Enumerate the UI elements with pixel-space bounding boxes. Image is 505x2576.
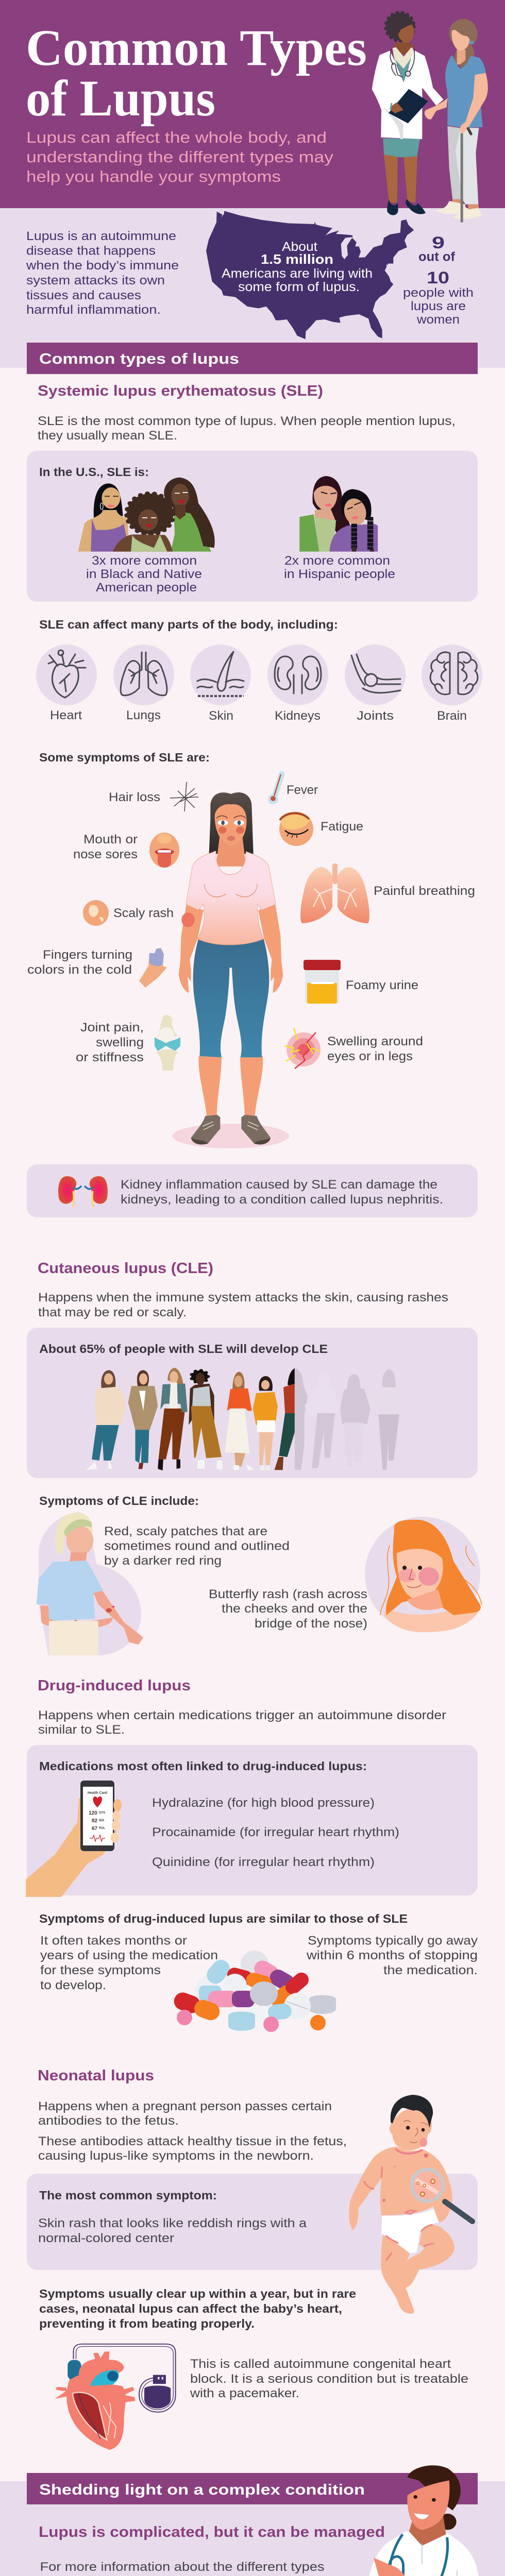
person 3 bbox=[158, 1368, 188, 1470]
title bbox=[26, 19, 367, 127]
faded person 8 bbox=[305, 1374, 341, 1469]
symptom: mouth or nose sores: Mouth or bbox=[83, 833, 138, 846]
text: red scaly patches: by a darker red ring bbox=[104, 1554, 222, 1568]
text: red scaly patches: sometimes round and outlined bbox=[104, 1539, 290, 1553]
pictogram: ten women bbox=[87, 1368, 406, 1470]
subheading: symptoms clear up bbox=[39, 2287, 356, 2330]
intro text: when the body’s immune bbox=[26, 259, 179, 273]
caption: 3x more common: in Black and Native bbox=[86, 567, 202, 581]
symptom: joint pain bbox=[76, 1015, 180, 1071]
section bar: shedding light bbox=[27, 2473, 478, 2504]
medication list: Hydralazine (for high blood pressure) bbox=[152, 1796, 375, 1810]
person 2 bbox=[128, 1370, 158, 1469]
symptom: fingers turning colors bbox=[27, 948, 167, 988]
statistic: 9 out of 10 women: 10 bbox=[427, 268, 449, 287]
text: symptoms go away: within 6 months of stopping bbox=[306, 1948, 478, 1962]
panel: 65 percent statistic: About 65% of people with SLE will develop CLE bbox=[39, 1342, 328, 1355]
medication list bbox=[152, 1796, 399, 1869]
panel: medications bbox=[26, 1745, 478, 1897]
text: butterfly rash: Butterfly rash (rash across bbox=[209, 1587, 367, 1601]
section bar: shedding light: Shedding light on a complex condition bbox=[39, 2482, 365, 2498]
intro text bbox=[26, 229, 179, 317]
statistic: 9 out of 10 women: women bbox=[416, 313, 460, 327]
US map with statistic: 1.5 million bbox=[261, 251, 333, 267]
medication list: Quinidine (for irregular heart rhythm) bbox=[152, 1855, 375, 1869]
text: months or years: years of using the medication bbox=[40, 1948, 218, 1962]
statistic: 9 out of 10 women bbox=[403, 233, 474, 327]
section bar: common types of lupus bbox=[27, 343, 478, 374]
CLE intro text bbox=[38, 1291, 448, 1319]
panel: most common symptom: normal-colored center bbox=[38, 2231, 174, 2245]
US map with statistic: Americans are living with bbox=[222, 266, 373, 281]
symptom: foamy urine: Foamy urine bbox=[346, 978, 418, 992]
panel: most common symptom: The most common symptom: bbox=[39, 2189, 217, 2202]
subheading: symptoms clear up: cases, neonatal lupus can affect the baby’s heart, bbox=[39, 2302, 342, 2315]
subtitle bbox=[26, 128, 334, 185]
intro text: Lupus is an autoimmune bbox=[26, 229, 176, 243]
illustration: woman with butterfly rash bbox=[365, 1517, 482, 1632]
symptom: swelling: eyes or in legs bbox=[327, 1049, 413, 1063]
panel: medications: Medications most often linked to drug-induced lupus: bbox=[39, 1759, 367, 1773]
title: of Lupus bbox=[26, 70, 215, 127]
title: Common Types bbox=[26, 19, 367, 76]
heading: can be managed: Lupus is complicated, but it can be managed bbox=[39, 2524, 385, 2540]
floor shadow bbox=[173, 1124, 289, 1148]
text: congenital heart block bbox=[190, 2357, 468, 2400]
neonatal intro text bbox=[38, 2099, 347, 2163]
illustration: hand holding phone bbox=[26, 1781, 122, 1897]
faded person 10 bbox=[372, 1369, 406, 1470]
illustration: heart with pacemaker bbox=[55, 2344, 176, 2450]
text: months or years: It often takes months or bbox=[40, 1934, 187, 1947]
icon: skin bbox=[190, 645, 251, 723]
neonatal intro text: causing lupus-like symptoms in the newborn. bbox=[38, 2149, 314, 2163]
illustration: woman with rash on arms bbox=[37, 1512, 143, 1655]
text: congenital heart block: with a pacemaker. bbox=[190, 2386, 299, 2400]
symptom: painful breathing bbox=[300, 863, 475, 923]
person 1 bbox=[87, 1370, 125, 1470]
symptom: fever: Fever bbox=[287, 783, 318, 797]
SLE intro text: they usually mean SLE. bbox=[38, 429, 177, 443]
statistic: 9 out of 10 women: lupus are bbox=[411, 299, 466, 313]
closing text: For more information about the different types bbox=[40, 2560, 325, 2574]
text: symptoms go away: Symptoms typically go away bbox=[308, 1934, 478, 1947]
subheading: parts of the body: SLE can affect many parts of the body, including: bbox=[39, 618, 338, 631]
patient bbox=[425, 19, 488, 223]
US map with statistic: About bbox=[282, 240, 317, 254]
subtitle: Lupus can affect the whole body, and bbox=[26, 128, 327, 146]
statistic: 9 out of 10 women: people with bbox=[403, 286, 474, 300]
intro text: disease that happens bbox=[26, 244, 156, 258]
heading: SLE: Systemic lupus erythematosus (SLE) bbox=[38, 383, 323, 399]
symptom: joint pain: Joint pain, bbox=[80, 1021, 144, 1035]
statistic: 9 out of 10 women: out of bbox=[418, 249, 456, 264]
subheading: symptoms clear up: preventing it from beating properly. bbox=[39, 2317, 255, 2330]
illustration: doctor and patient with cane bbox=[372, 13, 488, 223]
heading: neonatal lupus: Neonatal lupus bbox=[38, 2067, 154, 2084]
symptom: fatigue: Fatigue bbox=[321, 820, 363, 834]
section bar: common types of lupus: Common types of lupus bbox=[39, 351, 239, 367]
illustration: pile of pills bbox=[172, 1951, 336, 2032]
illustration: hand holding phone: Health Card bbox=[88, 1791, 107, 1795]
illustration: hand holding phone: PUL bbox=[99, 1827, 105, 1830]
statistic: 9 out of 10 women: 9 bbox=[432, 233, 445, 252]
intro text: harmful inflammation. bbox=[26, 303, 161, 317]
icon: joints bbox=[345, 645, 406, 723]
subheading: symptoms of CLE: Symptoms of CLE include: bbox=[39, 1494, 199, 1507]
text: months or years: to develop. bbox=[40, 1978, 106, 1992]
symptom: swelling: Swelling around bbox=[327, 1035, 423, 1048]
illustration: hand holding phone: DIA bbox=[99, 1819, 105, 1822]
illustration: hand holding phone: 120 bbox=[89, 1810, 97, 1816]
text: months or years: for these symptoms bbox=[40, 1963, 161, 1977]
illustration: two women bbox=[299, 476, 378, 552]
drug-induced intro text: similar to SLE. bbox=[38, 1723, 125, 1737]
illustration: baby with rash and magnifying glass bbox=[349, 2095, 473, 2314]
subheading: drug-induced symptoms: Symptoms of drug-induced lupus are similar to those of SLE bbox=[39, 1912, 408, 1925]
illustration: hand holding phone: SYS bbox=[99, 1811, 105, 1815]
icon: heart: Heart bbox=[50, 708, 82, 722]
symptom: joint pain: or stiffness bbox=[76, 1050, 144, 1064]
intro text: system attacks its own bbox=[26, 274, 165, 287]
subheading: symptoms clear up: Symptoms usually clear up within a year, but in rare bbox=[39, 2287, 356, 2300]
text: congenital heart block: block. It is a serious condition but is treatable bbox=[190, 2372, 468, 2386]
text: butterfly rash bbox=[209, 1587, 367, 1631]
icon: inflamed kidneys bbox=[58, 1176, 108, 1207]
text: red scaly patches: Red, scaly patches that are bbox=[104, 1524, 267, 1538]
icon: brain bbox=[422, 645, 482, 723]
icon: brain: Brain bbox=[437, 709, 467, 723]
caption: 3x more common: 3x more common bbox=[92, 554, 197, 568]
symptom: fingers turning colors: Fingers turning bbox=[43, 948, 132, 962]
symptom: scaly rash: Scaly rash bbox=[113, 906, 174, 920]
intro text: tissues and causes bbox=[26, 289, 141, 302]
neonatal intro text: Happens when a pregnant person passes certain bbox=[38, 2099, 332, 2113]
icon: heart bbox=[36, 645, 97, 722]
panel: lupus nephritis bbox=[27, 1164, 478, 1217]
symptom: painful breathing: Painful breathing bbox=[374, 884, 475, 898]
symptom: mouth or nose sores bbox=[73, 833, 179, 868]
caption: 2x more common: 2x more common bbox=[284, 554, 390, 568]
text: red scaly patches bbox=[104, 1524, 290, 1568]
neonatal intro text: These antibodies attack healthy tissue in the fetus, bbox=[38, 2134, 347, 2148]
person 7 half coloured bbox=[274, 1368, 308, 1470]
caption: 2x more common bbox=[284, 554, 395, 581]
panel: most common symptom: Skin rash that looks like reddish rings with a bbox=[38, 2216, 307, 2230]
subtitle: help you handle your symptoms bbox=[26, 167, 281, 185]
symptom: hair loss: Hair loss bbox=[109, 790, 160, 804]
CLE intro text: Happens when the immune system attacks the skin, causing rashes bbox=[38, 1291, 448, 1304]
caption: 3x more common: American people bbox=[96, 581, 197, 595]
symptom: swelling bbox=[284, 1028, 423, 1069]
text: symptoms go away bbox=[306, 1934, 478, 1977]
neonatal intro text: antibodies to the fetus. bbox=[38, 2114, 179, 2128]
text: butterfly rash: bridge of the nose) bbox=[255, 1617, 367, 1631]
icon row: body parts bbox=[36, 645, 482, 723]
heading: cutaneous lupus: Cutaneous lupus (CLE) bbox=[38, 1260, 213, 1277]
panel: lupus nephritis: Kidney inflammation caused by SLE can damage the bbox=[121, 1178, 437, 1192]
person 5 bbox=[225, 1372, 255, 1470]
person 4 bbox=[189, 1370, 222, 1470]
symptom: fever bbox=[268, 774, 318, 804]
panel: SLE demographics bbox=[27, 451, 478, 602]
text: symptoms go away: the medication. bbox=[383, 1963, 478, 1977]
icon: lungs: Lungs bbox=[126, 708, 161, 722]
symptom: hair loss bbox=[109, 782, 198, 811]
drug-induced intro text: Happens when certain medications trigger an autoimmune disorder bbox=[38, 1708, 446, 1722]
US map with statistic: some form of lupus. bbox=[238, 280, 360, 294]
faded person 9 bbox=[340, 1374, 371, 1466]
icon: lungs bbox=[113, 645, 174, 722]
symptom: fingers turning colors: colors in the cold bbox=[27, 963, 132, 977]
panel: 65 percent statistic bbox=[27, 1328, 478, 1478]
icon: kidneys: Kidneys bbox=[275, 709, 321, 723]
icon: kidneys bbox=[267, 645, 328, 723]
caption: 2x more common: in Hispanic people bbox=[284, 567, 395, 581]
symptom: foamy urine bbox=[304, 960, 418, 1004]
text: butterfly rash: the cheeks and over the bbox=[222, 1602, 367, 1616]
panel: SLE demographics: In the U.S., SLE is: bbox=[39, 465, 149, 479]
illustration: doctor pointing bbox=[365, 2465, 480, 2576]
caption: 3x more common bbox=[86, 554, 202, 595]
SLE intro text bbox=[38, 414, 456, 443]
subtitle: understanding the different types may bbox=[26, 148, 334, 166]
symptom: scaly rash bbox=[83, 900, 174, 926]
illustration: woman with symptoms bbox=[173, 792, 289, 1148]
panel: most common symptom bbox=[27, 2174, 478, 2270]
person 6 bbox=[253, 1376, 278, 1470]
illustration: hand holding phone: 82 bbox=[92, 1818, 98, 1824]
US map with statistic bbox=[206, 211, 414, 339]
illustration: hand holding phone: 67 bbox=[92, 1826, 98, 1832]
drug-induced intro text bbox=[38, 1708, 446, 1737]
panel: lupus nephritis: kidneys, leading to a condition called lupus nephritis. bbox=[121, 1193, 443, 1207]
symptom: joint pain: swelling bbox=[96, 1036, 144, 1049]
illustration: three women bbox=[78, 478, 215, 552]
SLE intro text: SLE is the most common type of lupus. When people mention lupus, bbox=[38, 414, 456, 428]
heading: drug-induced lupus: Drug-induced lupus bbox=[38, 1677, 191, 1694]
text: months or years bbox=[40, 1934, 218, 1992]
icon: joints: Joints bbox=[357, 709, 394, 723]
symptom: mouth or nose sores: nose sores bbox=[73, 848, 138, 861]
subheading: symptoms of SLE: Some symptoms of SLE are: bbox=[39, 751, 210, 764]
symptom: fatigue bbox=[279, 812, 363, 846]
text: congenital heart block: This is called autoimmune congenital heart bbox=[190, 2357, 451, 2371]
CLE intro text: that may be red or scaly. bbox=[38, 1306, 187, 1319]
icon: skin: Skin bbox=[209, 709, 233, 723]
doctor bbox=[372, 13, 444, 215]
medication list: Procainamide (for irregular heart rhythm) bbox=[152, 1825, 399, 1839]
